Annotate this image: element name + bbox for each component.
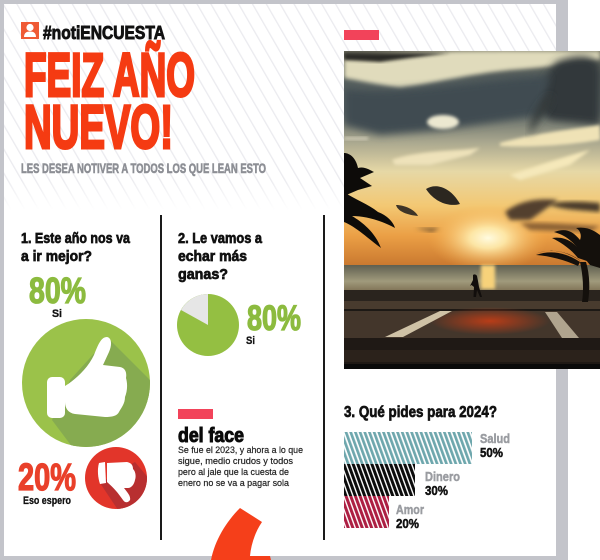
hashtag heading: #notiENCUESTA [43,23,165,43]
question 1 heading: a ir mejor? [21,248,92,265]
right palm [535,228,600,302]
question 3 heading: 3. Qué pides para 2024? [344,404,497,421]
red accent bar: top [344,30,379,40]
stat: 80% yes: Si [52,308,62,320]
stat: 20%: 20% [18,457,76,499]
icon: thumbs down [85,447,150,510]
icon: thumbs up [22,319,150,447]
del face text: pero al jale que la cuesta de [178,467,289,477]
bar: dinero: 30% [425,483,448,498]
question 1 heading [21,230,131,265]
column dividers [160,215,325,540]
del face text: enero no se va a pagar sola [178,478,290,488]
beach and road [344,290,600,301]
gray strip under photo [556,369,568,560]
stat: 80% yes: 80% [29,270,86,311]
title: FEIZ AÑO [24,41,195,109]
photo: sunset beach [344,51,600,369]
bar: dinero [344,464,460,498]
del face text [178,445,303,488]
bar: salud [344,431,510,464]
question 2 heading [178,230,263,283]
stat: 80% yes, pie: Si [246,335,255,347]
icon: user badge [21,22,39,39]
bar: amor: Amor [396,502,424,517]
person [470,274,482,297]
stat: 80% yes, pie: 80% [247,299,301,338]
del face heading: del face [178,425,244,447]
stat: 20% [18,457,76,507]
stat: 80% yes, pie [246,299,301,347]
bar: dinero: Dinero [425,469,460,484]
title: NUEVO! [24,93,173,161]
bar: salud: Salud [480,431,510,446]
bar: amor [344,496,424,531]
question 2 heading: ganas? [178,266,228,283]
question 2 heading: echar más [178,248,247,265]
pie chart [177,294,239,356]
subtitle: LES DESEA NOTIVER A TODOS LOS QUE LEAN ESTO [21,161,266,176]
bar: salud: 50% [480,445,503,460]
title [24,41,195,161]
sea [344,265,600,292]
bar: amor: 20% [396,516,419,531]
red accent bar: del face [178,409,213,419]
bar chart [344,431,510,531]
del face text: Se fue el 2023, y ahora a lo que [178,445,303,455]
orange arc shape [211,508,271,560]
stat: 20%: Eso espero [23,495,71,507]
stat: 80% yes [29,270,86,320]
del face text: sigue, medio crudos y todos [178,456,293,466]
left palm [344,153,395,248]
question 2 heading: 2. Le vamos a [178,230,263,247]
question 1 heading: 1. Este año nos va [21,230,131,247]
